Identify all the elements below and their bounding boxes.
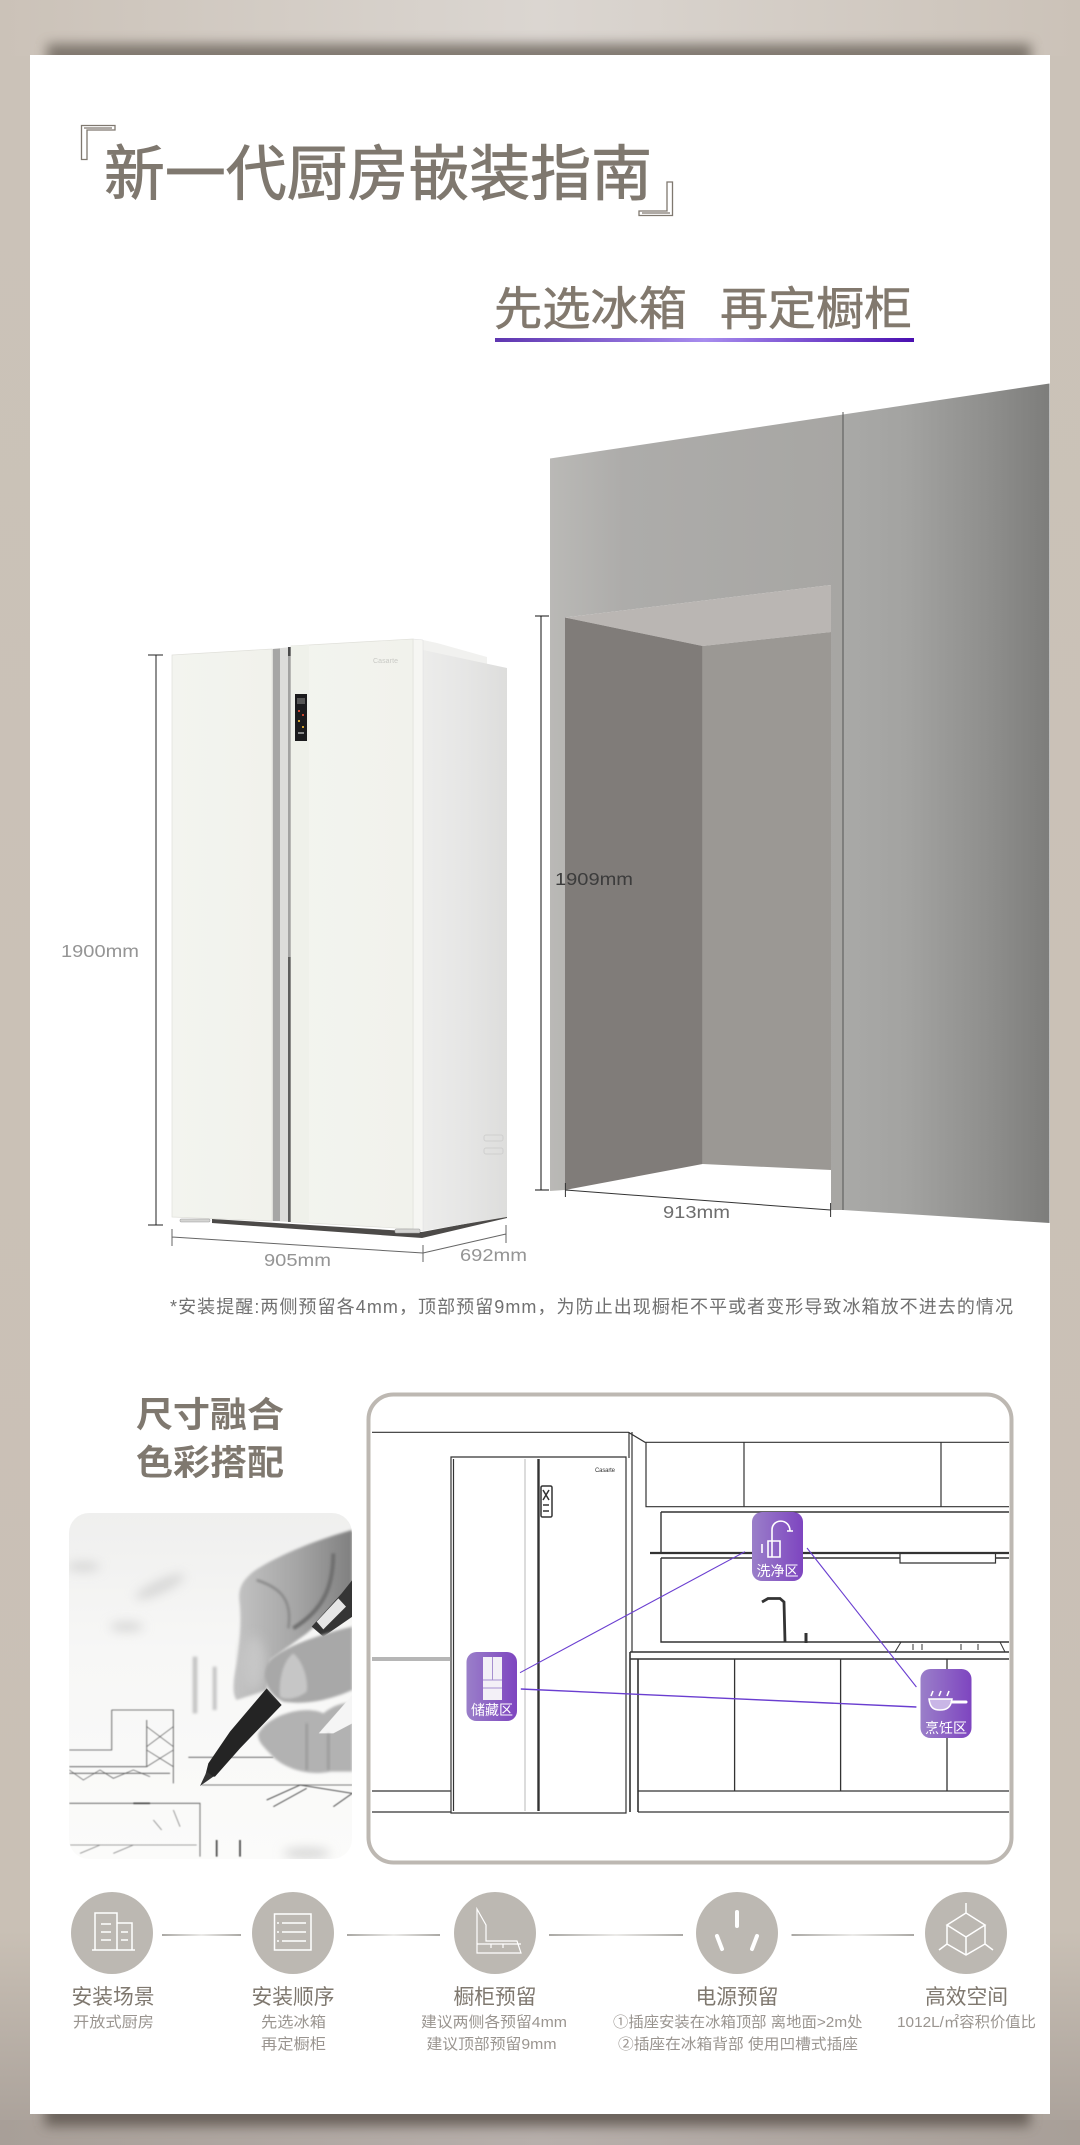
height dimension: [61, 655, 163, 1225]
badge: cooking zone: 烹饪区: [925, 1720, 967, 1736]
badge: cooking zone: [920, 1669, 972, 1738]
badge: washing zone: [752, 1512, 803, 1581]
width dimension: [172, 1229, 423, 1270]
title text: 新一代厨房嵌装指南: [104, 141, 652, 208]
top ridge: [423, 640, 487, 664]
step 1 label: 安装场景: [72, 1986, 154, 2009]
step 2 detail: 再定橱柜: [261, 2036, 326, 2053]
step 3: cabinet reserve: [421, 1892, 567, 2053]
left cabinet face: [550, 414, 843, 1210]
step 4 detail: ①插座安装在冰箱顶部 离地面>2m处: [613, 2014, 862, 2031]
step 4: power reserve: [613, 1892, 862, 2053]
depth dimension: [423, 1225, 527, 1265]
icon: closing bracket: [639, 182, 672, 216]
kitchen sketch: [372, 1432, 1009, 1813]
step 5 detail: 1012L/㎡容积价值比: [897, 2014, 1036, 2031]
step 4 detail: [613, 2014, 862, 2053]
installation note: *安装提醒:两侧预留各4mm，顶部预留9mm，为防止出现橱柜不平或者变形导致冰箱放不进去的情况: [170, 1297, 1013, 1317]
cabinet width dimension: 913mm: [663, 1202, 730, 1222]
door gap handle: [272, 647, 291, 1222]
title: [82, 126, 672, 216]
niche back wall: [703, 632, 831, 1170]
back of hand: [234, 1530, 352, 1700]
badge: washing zone: 洗净区: [756, 1563, 798, 1579]
step 5: space: [897, 1892, 1036, 2031]
step 2: order: [252, 1892, 334, 2053]
side vents: [484, 1135, 503, 1154]
subtitle: 再定橱柜: [720, 283, 912, 335]
pen upper: [312, 1580, 352, 1637]
step 3 label: 橱柜预留: [454, 1986, 536, 2009]
heading: size and colour: 尺寸融合: [136, 1396, 284, 1435]
badge: storage zone: 储藏区: [471, 1702, 513, 1718]
step 2 label: 安装顺序: [252, 1986, 334, 2009]
backsplash: [661, 1512, 1009, 1642]
control display: [295, 694, 307, 741]
step 2 detail: [261, 2014, 326, 2053]
height dimension: 1900mm: [61, 941, 139, 961]
smudges: [67, 1562, 330, 1859]
left door: [172, 649, 272, 1221]
left wall details: [372, 1658, 451, 1660]
right door: [291, 639, 413, 1229]
icon: buildings: [71, 1892, 153, 1974]
plan lines: [69, 1710, 352, 1857]
brand logo: Casarte: [595, 1468, 616, 1474]
feet: [180, 1219, 420, 1233]
icon: cube: [925, 1892, 1007, 1974]
cabinet divider line: [842, 412, 844, 1210]
burners: [895, 1642, 1005, 1652]
niche left wall: [565, 618, 703, 1190]
heading: size and colour: [136, 1396, 284, 1483]
installation steps row: [71, 1892, 1036, 2053]
width dimension: 905mm: [264, 1250, 331, 1270]
pen barrel: [205, 1688, 282, 1777]
step 3 detail: 建议两侧各预留4mm: [421, 2014, 567, 2031]
step 3 detail: [421, 2014, 567, 2053]
front edge strip: [413, 639, 423, 1231]
blurred writing: [193, 1657, 217, 1713]
icon: opening bracket: [82, 126, 115, 160]
cabinet niche: [535, 384, 1050, 1223]
kitchen line drawing panel: [368, 1394, 1012, 1862]
side panel: [423, 650, 507, 1231]
photo: hand sketching a plan: [67, 1513, 352, 1859]
connector lines: [520, 1548, 916, 1707]
fridge outline: [451, 1457, 626, 1813]
subtitle underline: [495, 338, 914, 342]
right cabinet face: [843, 384, 1050, 1223]
subtitle: [494, 283, 914, 342]
counter: [630, 1652, 1009, 1812]
step 4 detail: ②插座在冰箱背部 使用凹槽式插座: [618, 2036, 858, 2053]
refrigerator product: [61, 639, 527, 1270]
icon: L-square: [454, 1892, 536, 1974]
thumb: [265, 1627, 352, 1703]
lower cabinets: [638, 1659, 1009, 1812]
cabinet width dimension: [565, 1183, 831, 1222]
subtitle: 先选冰箱: [494, 283, 687, 335]
heading: size and colour: 色彩搭配: [136, 1444, 284, 1483]
fridge display: [541, 1486, 552, 1517]
icon: list: [252, 1892, 334, 1974]
lower fingers: [258, 1703, 352, 1773]
cabinet height dimension: [535, 616, 633, 1190]
step 3 detail: 建议顶部预留9mm: [426, 2036, 556, 2053]
step 1: scene: [71, 1892, 154, 2031]
step 4 label: 电源预留: [696, 1986, 778, 2009]
step 1 detail: 开放式厨房: [73, 2014, 154, 2031]
icon: socket: [696, 1892, 778, 1974]
niche ceiling: [565, 585, 831, 646]
step 2 detail: 先选冰箱: [261, 2014, 326, 2031]
panel frame: [368, 1394, 1012, 1862]
connectors: [162, 1934, 914, 1936]
upper cabinets: [646, 1442, 1009, 1507]
step 5 label: 高效空间: [925, 1986, 1008, 2009]
badge: storage zone: [466, 1652, 517, 1721]
cabinet height dimension: 1909mm: [555, 869, 633, 889]
floor shadow: [212, 1216, 507, 1238]
faucet: [762, 1598, 785, 1642]
depth dimension: 692mm: [460, 1245, 527, 1265]
brand logo: Casarte: [373, 658, 398, 665]
